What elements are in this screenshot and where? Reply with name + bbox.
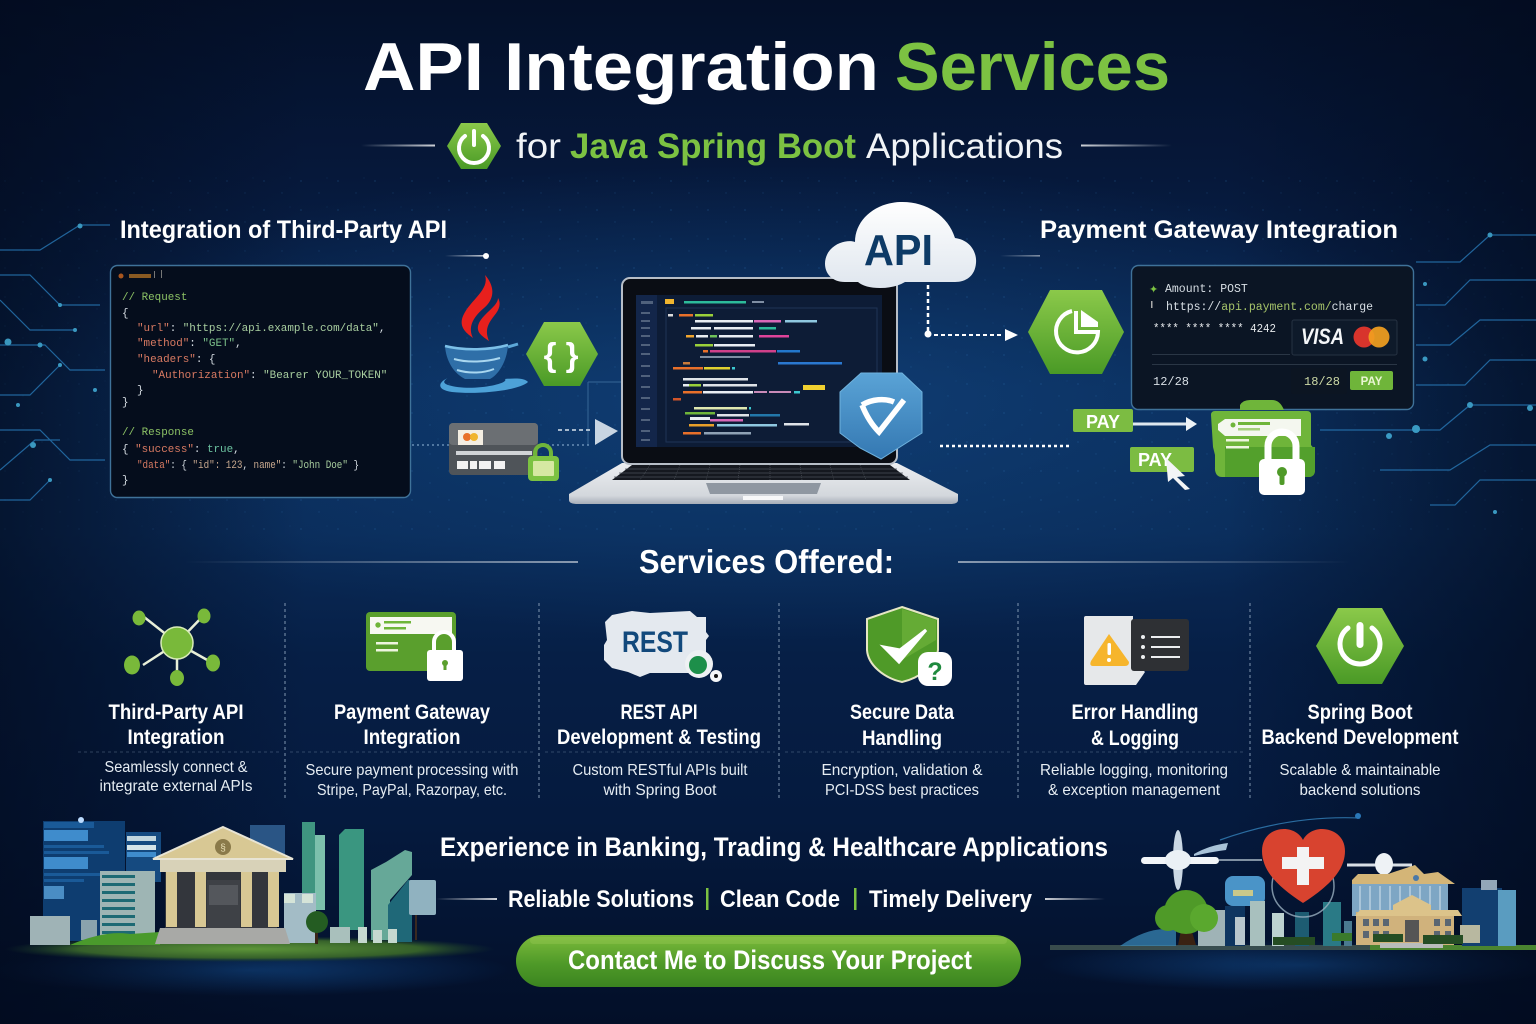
icon: card with lock bbox=[449, 423, 559, 481]
panel: payment details: ✦ bbox=[1149, 284, 1158, 296]
icon: code hexagon: { } bbox=[544, 336, 579, 373]
icon: spring power hexagon bbox=[1316, 608, 1404, 684]
heading: third-party API: Integration of Third-Party API bbox=[120, 216, 447, 244]
service: REST API: REST API bbox=[620, 701, 698, 724]
service: spring boot bbox=[1262, 608, 1458, 799]
panel: third-party code: { "success": true, bbox=[122, 444, 240, 456]
service: error handling: & exception management bbox=[1048, 782, 1221, 799]
icon: card and lock bbox=[366, 612, 463, 681]
icon: java cup bbox=[440, 275, 528, 393]
subtitle: for bbox=[516, 127, 561, 166]
service: spring boot: Spring Boot bbox=[1308, 701, 1412, 724]
icon: shield with check: ? bbox=[927, 658, 943, 686]
service: spring boot: Backend Development bbox=[1262, 726, 1458, 749]
service: third-party API bbox=[100, 608, 252, 795]
service: spring boot: Scalable & maintainable bbox=[1280, 762, 1441, 779]
service: payment gateway bbox=[306, 612, 518, 799]
panel: third-party code: } bbox=[137, 385, 144, 397]
code lines on screen bbox=[668, 314, 842, 434]
dashed arrow: cloud to gateway bbox=[924, 285, 1018, 341]
service: REST API: Development & Testing bbox=[557, 726, 761, 749]
service: REST API bbox=[557, 611, 761, 799]
icon: network hub bbox=[124, 608, 220, 686]
service: REST API: with Spring Boot bbox=[603, 782, 717, 799]
service: secure data: Secure Data bbox=[850, 701, 954, 724]
sparkle bbox=[1000, 255, 1040, 257]
heading: payment gateway: Payment Gateway Integration bbox=[1040, 216, 1398, 244]
icon: REST badge: REST bbox=[622, 626, 688, 659]
service: third-party API: Third-Party API bbox=[108, 701, 244, 724]
panel: third-party code: // Request bbox=[122, 292, 187, 304]
icon: medical helicopter bbox=[1141, 813, 1361, 890]
panel: third-party code: "url": "https://api.example.com/data", bbox=[137, 323, 385, 335]
tagline row bbox=[436, 886, 1105, 913]
column dividers bbox=[78, 603, 1250, 800]
panel: third-party code: } bbox=[122, 475, 129, 487]
service: spring boot: backend solutions bbox=[1300, 782, 1420, 799]
tagline row: Clean Code bbox=[720, 886, 840, 913]
icon: REST badge bbox=[604, 611, 722, 682]
service: REST API: Custom RESTful APIs built bbox=[572, 762, 748, 779]
button: pay with cursor bbox=[1130, 447, 1194, 490]
panel: payment details: **** **** **** 4242 bbox=[1153, 322, 1276, 336]
service: third-party API: integrate external APIs bbox=[100, 778, 252, 795]
icon: gateway hexagon bbox=[1028, 290, 1124, 374]
service: error handling: Reliable logging, monitoring bbox=[1040, 762, 1228, 779]
heading: services offered: Services Offered: bbox=[639, 543, 894, 580]
illustration: healthcare city bbox=[1050, 813, 1536, 950]
service: secure data: PCI-DSS best practices bbox=[825, 782, 979, 799]
icon: small lock bbox=[528, 445, 559, 481]
circuit lines left bbox=[0, 224, 110, 500]
service: third-party API: Integration bbox=[128, 726, 224, 749]
service: secure data bbox=[822, 607, 983, 799]
panel: third-party code: "headers": { bbox=[137, 354, 215, 366]
illustration: banking city bbox=[5, 817, 495, 962]
sparkle bbox=[445, 253, 489, 259]
panel: payment details bbox=[1132, 266, 1414, 410]
button: pay with arrow: PAY bbox=[1086, 412, 1120, 432]
service: secure data: Encryption, validation & bbox=[822, 762, 983, 779]
icon: shield with check bbox=[867, 607, 952, 686]
service: payment gateway: Stripe, PayPal, Razorpay, etc. bbox=[317, 782, 507, 799]
subtitle bbox=[361, 123, 1172, 169]
icon: heart with cross bbox=[1262, 829, 1345, 917]
panel: payment details: PAY bbox=[1361, 376, 1383, 388]
icon: bank bbox=[153, 827, 293, 944]
icon: cursor bbox=[1166, 458, 1190, 490]
icon: laptop bbox=[569, 278, 958, 504]
arrow into laptop bbox=[595, 419, 618, 445]
button: contact bbox=[516, 935, 1021, 987]
icon: round drone bbox=[1347, 853, 1412, 875]
icon: white padlock bbox=[1259, 432, 1305, 495]
subtitle: Applications bbox=[866, 127, 1063, 166]
panel: payment details: 18/28 bbox=[1304, 375, 1340, 389]
panel: third-party code bbox=[110, 266, 410, 498]
panel: payment details: https://api.payment.com/charge bbox=[1166, 301, 1373, 314]
service: error handling: Error Handling bbox=[1072, 701, 1198, 724]
icon: card logo bbox=[1354, 326, 1390, 348]
service: payment gateway: Payment Gateway bbox=[334, 701, 490, 724]
panel: payment details: 12/28 bbox=[1153, 375, 1189, 389]
icon: hospital bbox=[1273, 865, 1463, 948]
tagline row: Timely Delivery bbox=[869, 886, 1033, 913]
service: error handling: & Logging bbox=[1091, 727, 1179, 750]
button: pay with cursor: PAY bbox=[1138, 450, 1172, 470]
button: pay with arrow bbox=[1073, 409, 1197, 432]
panel: third-party code: "data": { "id": 123, name": "John Doe" } bbox=[137, 460, 359, 472]
panel: third-party code: } bbox=[122, 397, 129, 409]
title bbox=[363, 29, 1170, 105]
title: API Integration bbox=[363, 29, 879, 105]
icon: tree bbox=[306, 911, 328, 944]
panel: third-party code: "method": "GET", bbox=[137, 338, 242, 350]
service: error handling bbox=[1040, 616, 1228, 799]
panel: third-party code: // Response bbox=[122, 427, 194, 439]
panel: payment details: VISA bbox=[1301, 324, 1344, 349]
icon: bank: § bbox=[220, 843, 226, 854]
heading: experience: Experience in Banking, Trading & Healthcare Applications bbox=[440, 832, 1108, 862]
service: secure data: Handling bbox=[862, 727, 942, 750]
icon: shield bbox=[840, 373, 922, 459]
title: Services bbox=[895, 29, 1170, 105]
service: payment gateway: Secure payment processing with bbox=[306, 762, 518, 779]
panel: payment details: Amount: POST bbox=[1165, 283, 1248, 296]
panel: third-party code: { bbox=[122, 308, 129, 320]
icon: warning and log bbox=[1084, 616, 1189, 685]
tagline row: Reliable Solutions bbox=[508, 886, 694, 913]
icon: green wallet with lock bbox=[1211, 400, 1315, 495]
service: third-party API: Seamlessly connect & bbox=[104, 759, 248, 776]
icon: code hexagon bbox=[526, 322, 598, 386]
button: contact: Contact Me to Discuss Your Project bbox=[568, 945, 972, 975]
icon: API cloud: API bbox=[864, 226, 933, 275]
panel: third-party code: "Authorization": "Bearer YOUR_TOKEN" bbox=[152, 370, 387, 382]
subtitle: Java Spring Boot bbox=[570, 127, 856, 166]
circuit lines right bbox=[1320, 232, 1536, 514]
service: payment gateway: Integration bbox=[364, 726, 460, 749]
dotted line bbox=[940, 445, 1070, 447]
icon: green tree bbox=[1155, 890, 1218, 945]
icon: API cloud bbox=[825, 202, 976, 288]
icon: spring power hexagon bbox=[447, 123, 501, 169]
connector lines bbox=[412, 382, 622, 445]
